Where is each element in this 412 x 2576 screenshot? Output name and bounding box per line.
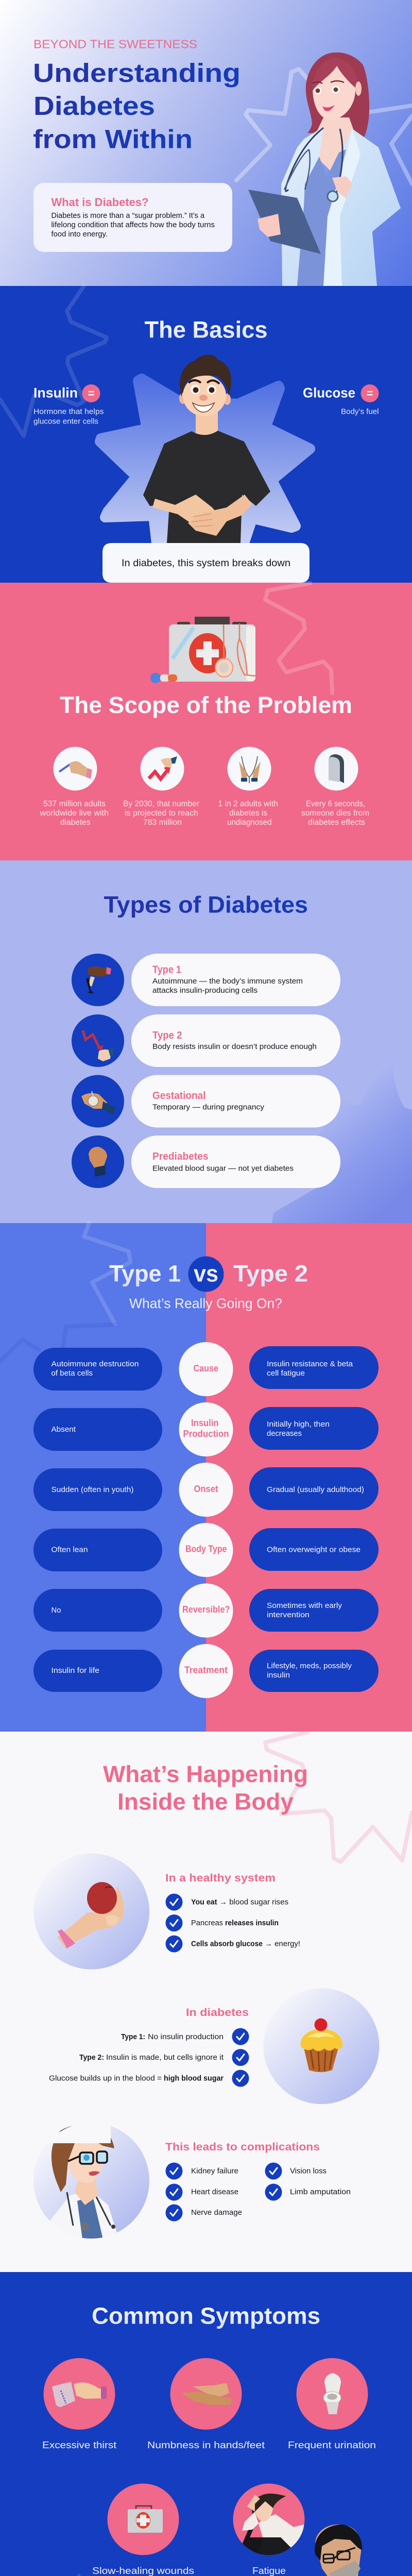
row: treatment: Lifestyle, meds, possibly xyxy=(267,1662,352,1670)
illustration: first aid kit xyxy=(150,617,256,683)
heading: Inside the Body xyxy=(117,1789,294,1815)
stat: every 6 seconds xyxy=(301,747,369,827)
row: type 2 xyxy=(72,1014,340,1067)
stat: 1 in 2 undiagnosed: diabetes is xyxy=(229,809,267,818)
eyebrow: BEYOND THE SWEETNESS xyxy=(33,37,197,50)
row: insulin production: Insulin xyxy=(191,1417,218,1428)
subheading: What’s Really Going On? xyxy=(129,1296,282,1311)
stat: every 6 seconds: Every 6 seconds, xyxy=(306,800,365,808)
stat: 783 million: By 2030, that number xyxy=(123,800,199,808)
row: insulin production: Initially high, then xyxy=(267,1420,330,1429)
block: in diabetes: Type 2: xyxy=(79,2053,104,2062)
row: reversible: Sometimes with early xyxy=(267,1601,342,1610)
stat: every 6 seconds: diabetes effects xyxy=(308,818,365,827)
definition: glucose: Body’s fuel xyxy=(341,407,379,416)
stat: every 6 seconds: someone dies from xyxy=(301,809,369,818)
block: complications: Limb amputation xyxy=(290,2188,351,2196)
heading: What’s Happening xyxy=(103,1761,308,1787)
row: insulin production: Absent xyxy=(52,1425,76,1434)
block: complications: Nerve damage xyxy=(191,2208,242,2217)
stat: 1 in 2 undiagnosed: undiagnosed xyxy=(227,818,272,827)
panel: type 1 vs type 2 xyxy=(0,1223,412,1732)
row: treatment: insulin xyxy=(267,1671,290,1680)
callout: what is diabetes: lifelong condition that affects how the body turns xyxy=(52,221,215,229)
row: treatment: Treatment xyxy=(184,1664,228,1675)
block: complications: This leads to complications xyxy=(165,2141,320,2153)
block: in a healthy system: Pancreas xyxy=(191,1919,223,1927)
row: reversible xyxy=(33,1584,379,1637)
symptom: numbness xyxy=(147,2358,265,2450)
heading xyxy=(109,1256,308,1292)
row: type 1: Autoimmune — the body’s immune system xyxy=(152,977,303,986)
definition: insulin: glucose enter cells xyxy=(33,417,98,426)
block: in a healthy system: → energy! xyxy=(265,1939,300,1948)
block: in a healthy system xyxy=(165,1872,300,1953)
row: treatment: Insulin for life xyxy=(52,1666,99,1675)
illustration: doctor with clipboard xyxy=(259,2524,412,2576)
definition: insulin: Hormone that helps xyxy=(33,407,104,416)
panel: common symptoms xyxy=(0,2272,412,2576)
row: reversible: intervention xyxy=(267,1611,310,1619)
row: type 2: Type 2 xyxy=(152,1030,182,1041)
callout: system breaks down xyxy=(102,543,310,583)
row: cause: Cause xyxy=(194,1363,218,1374)
definition: glucose: Glucose xyxy=(303,385,355,401)
definition: glucose: = xyxy=(367,387,373,400)
stat: 1 in 2 undiagnosed xyxy=(218,747,278,827)
block: in a healthy system: You eat xyxy=(191,1898,217,1906)
block: in diabetes: Glucose builds up in the blood = xyxy=(49,2074,162,2082)
symptom: excessive thirst: Excessive thirst xyxy=(42,2440,116,2450)
heading xyxy=(103,1761,308,1815)
heading: Type 1 xyxy=(109,1260,181,1287)
row: insulin production: Production xyxy=(183,1428,229,1439)
heading: Type 2 xyxy=(233,1260,308,1287)
illustration: man holding stomach xyxy=(143,354,270,543)
definition: insulin: Insulin xyxy=(33,385,78,401)
row: gestational xyxy=(72,1075,340,1127)
row: cause: of beta cells xyxy=(52,1369,93,1378)
heading: The Scope of the Problem xyxy=(60,692,352,718)
row: body type xyxy=(33,1523,379,1577)
block: complications xyxy=(165,2141,351,2222)
block: in diabetes: high blood sugar xyxy=(164,2074,224,2082)
block: in a healthy system: → blood sugar rises xyxy=(219,1898,288,1906)
row: onset xyxy=(33,1463,379,1517)
illustration: woman doctor with tablet xyxy=(248,53,401,286)
panel: inside the body xyxy=(33,1732,412,2239)
block: in diabetes xyxy=(49,2007,249,2087)
row: onset: Onset xyxy=(194,1483,218,1494)
block: complications: Heart disease xyxy=(191,2188,238,2196)
definition: insulin xyxy=(33,384,104,426)
title: Understanding xyxy=(33,58,241,88)
illustration: cupcake xyxy=(264,1988,379,2104)
row: insulin production: decreases xyxy=(267,1429,302,1438)
row: cause: Autoimmune destruction xyxy=(52,1360,139,1368)
row: gestational: Temporary — during pregnancy xyxy=(152,1103,265,1112)
callout: what is diabetes xyxy=(33,183,232,252)
row: prediabetes: Elevated blood sugar — not yet diabetes xyxy=(152,1164,294,1173)
stat: 537 million: 537 million adults xyxy=(43,800,106,808)
row: prediabetes xyxy=(72,1136,340,1188)
symptom: slow-healing wounds xyxy=(92,2483,194,2576)
stat: 783 million: 783 million xyxy=(143,818,182,827)
callout: what is diabetes: food into energy. xyxy=(52,230,108,239)
stat: 537 million: diabetes xyxy=(60,818,91,827)
block: in a healthy system: Cells absorb glucose xyxy=(191,1939,263,1948)
stat: 783 million: is projected to reach xyxy=(125,809,198,818)
block: complications: Vision loss xyxy=(290,2167,327,2175)
row: type 1: attacks insulin-producing cells xyxy=(152,986,258,995)
block: in diabetes: In diabetes xyxy=(186,2007,249,2019)
symptom: slow-healing wounds: Slow-healing wounds xyxy=(92,2566,194,2576)
symptom: numbness: Numbness in hands/feet xyxy=(147,2440,265,2450)
block: in a healthy system: In a healthy system xyxy=(165,1872,276,1884)
row: treatment xyxy=(33,1644,379,1698)
symptom: fatigue: Fatigue xyxy=(252,2566,286,2576)
stat: 537 million xyxy=(39,747,109,827)
panel: types of diabetes xyxy=(0,860,412,1223)
row: reversible: Reversible? xyxy=(182,1604,230,1615)
callout: system breaks down: In diabetes, this system breaks down xyxy=(122,558,290,569)
row: cause xyxy=(33,1342,379,1396)
symptom: excessive thirst xyxy=(42,2358,116,2450)
title: from Within xyxy=(33,125,193,154)
heading: The Basics xyxy=(144,316,268,343)
illustration: hand holding apple xyxy=(33,1854,149,1969)
row: onset: Gradual (usually adulthood) xyxy=(267,1485,364,1494)
row: insulin production xyxy=(33,1402,379,1456)
stat: 783 million xyxy=(123,747,199,827)
panel: scope of the problem xyxy=(0,583,412,860)
stat: 1 in 2 undiagnosed: 1 in 2 adults with xyxy=(218,800,278,808)
row: cause: cell fatigue xyxy=(267,1369,305,1378)
block: complications: Kidney failure xyxy=(191,2167,238,2175)
row: gestational: Gestational xyxy=(152,1090,206,1101)
heading: Common Symptoms xyxy=(92,2303,320,2329)
callout: what is diabetes: What is Diabetes? xyxy=(52,196,148,209)
row: body type: Often lean xyxy=(52,1546,88,1554)
panel: the basics xyxy=(0,286,412,583)
definition: glucose xyxy=(303,384,379,416)
row: type 1 xyxy=(72,954,340,1006)
row: reversible: No xyxy=(52,1606,61,1615)
row: body type: Body Type xyxy=(185,1544,227,1554)
panel: hero xyxy=(0,0,412,286)
row: cause: Insulin resistance & beta xyxy=(267,1360,353,1368)
row: type 1: Type 1 xyxy=(152,964,181,976)
title: Diabetes xyxy=(33,91,155,121)
symptom: frequent urination: Frequent urination xyxy=(288,2440,376,2450)
shape: star backdrop xyxy=(100,379,310,543)
block: in diabetes: Type 1: xyxy=(121,2032,145,2041)
symptom: fatigue xyxy=(233,2483,305,2576)
symptom: frequent urination xyxy=(288,2358,376,2450)
definition: insulin: = xyxy=(88,387,94,400)
block: in diabetes: No insulin production xyxy=(148,2032,224,2041)
heading: Types of Diabetes xyxy=(104,891,308,918)
row: onset: Sudden (often in youth) xyxy=(52,1485,134,1494)
illustration: woman doctor with glasses xyxy=(33,2123,149,2241)
stat: 537 million: worldwide live with xyxy=(39,809,109,818)
title xyxy=(33,58,241,154)
block: in a healthy system: releases insulin xyxy=(225,1919,279,1927)
callout: what is diabetes: Diabetes is more than a “sugar problem.” It’s a xyxy=(52,211,205,220)
row: type 2: Body resists insulin or doesn’t produce enough xyxy=(152,1042,317,1051)
row: prediabetes: Prediabetes xyxy=(152,1151,208,1162)
row: body type: Often overweight or obese xyxy=(267,1546,360,1554)
heading: vs xyxy=(194,1260,218,1287)
block: in diabetes: Insulin is made, but cells ignore it xyxy=(106,2053,224,2062)
